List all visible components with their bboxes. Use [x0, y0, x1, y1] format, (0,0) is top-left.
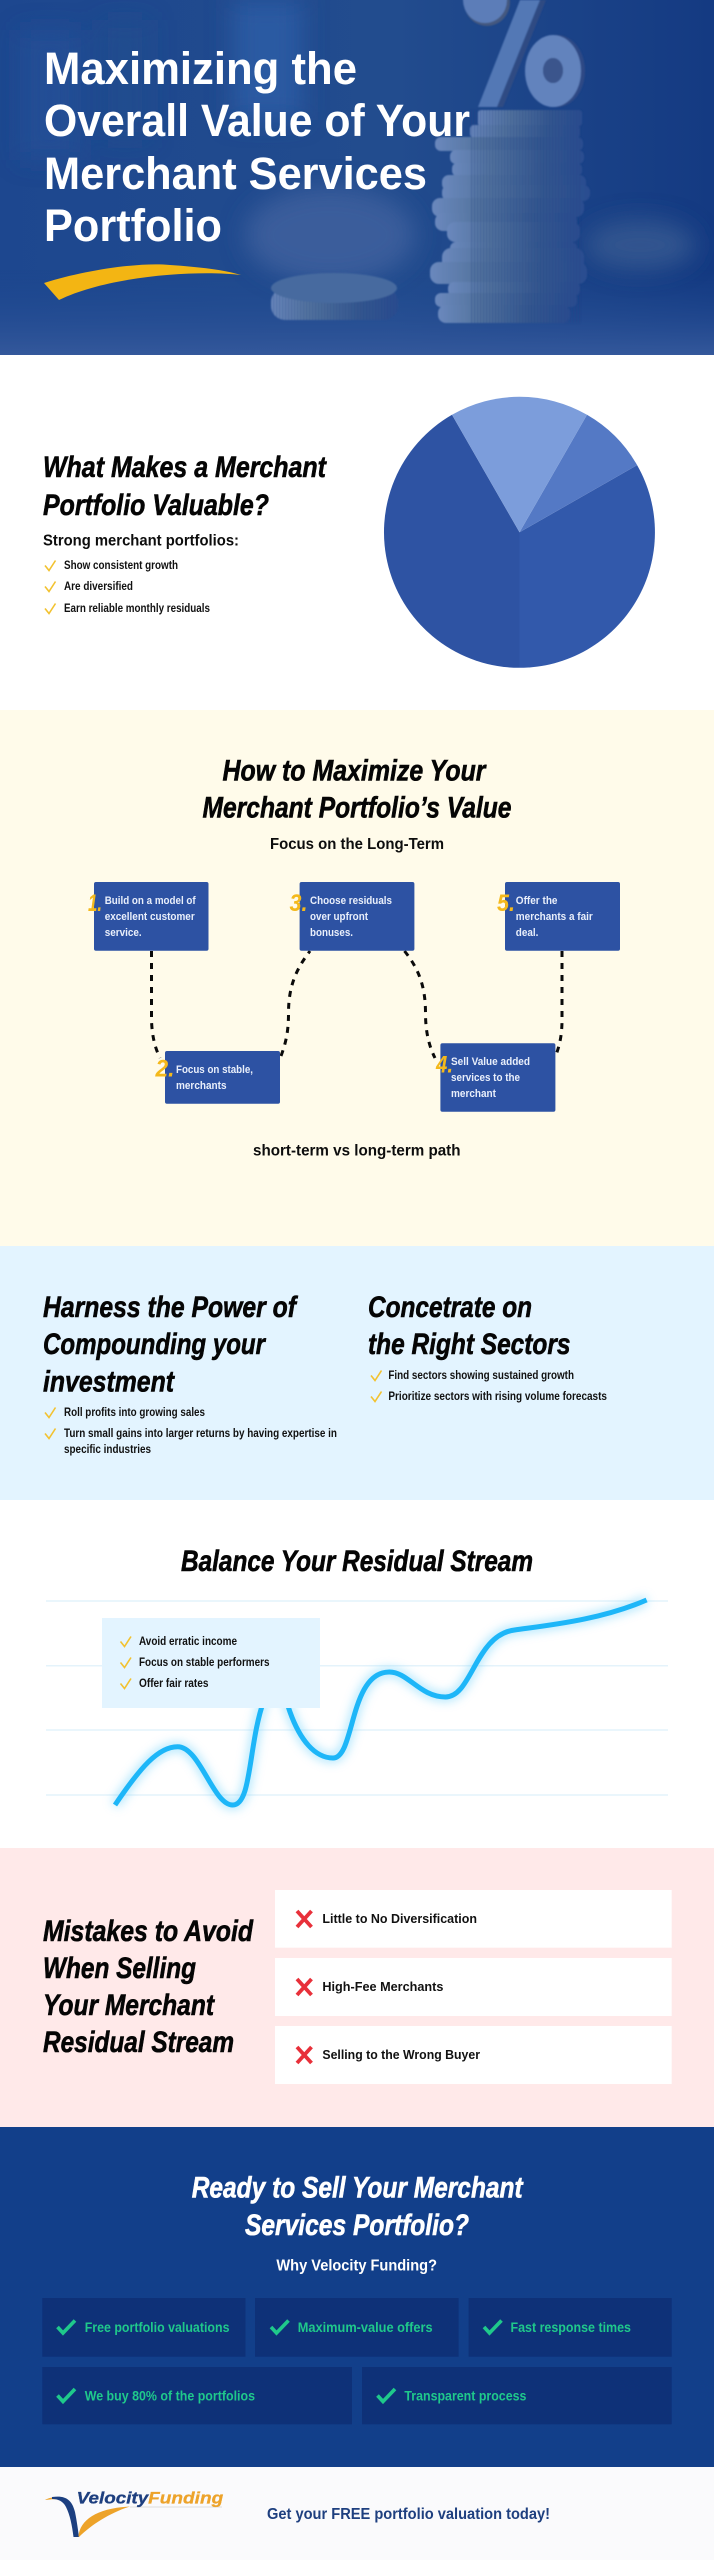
mistake card 2: High-Fee Merchants	[322, 1979, 443, 1994]
callout: Focus on stable performers	[139, 1657, 270, 1669]
heading: sectors: Concetrate on	[368, 1291, 532, 1324]
callout: Offer fair rates	[139, 1678, 208, 1690]
panel: what makes a portfolio valuable	[0, 355, 714, 710]
hero background photo: blurred shapes	[20, 0, 695, 283]
title	[44, 43, 470, 251]
line chart	[46, 1600, 668, 1805]
heading: When Selling	[43, 1952, 196, 1985]
heading: What Makes a Merchant	[43, 451, 328, 484]
benefit: free valuations	[42, 2298, 245, 2357]
heading: compounding: Compounding your	[43, 1328, 267, 1361]
benefit: we buy 80%	[42, 2367, 352, 2424]
illustration: small coin stack	[271, 273, 398, 320]
callout: Avoid erratic income	[139, 1636, 237, 1648]
heading: Merchant Portfolio’s Value	[202, 792, 512, 824]
checklist: compounding: specific industries	[64, 1444, 151, 1456]
subheading: Strong merchant portfolios:	[43, 532, 239, 550]
mistake card 3	[275, 2026, 672, 2084]
heading: How to Maximize Your	[222, 754, 487, 788]
panel: how to maximize	[0, 710, 714, 1246]
mistake card 1	[275, 1890, 672, 1948]
checklist: sectors	[371, 1370, 607, 1403]
benefit: fast response	[469, 2298, 672, 2357]
step 3: over upfront	[310, 911, 368, 923]
heading: Your Merchant	[43, 1989, 216, 2022]
subheading: Focus on the Long-Term	[270, 836, 444, 853]
callout	[102, 1618, 320, 1708]
step 1: Build on a model of	[105, 895, 196, 907]
step 5: Offer the	[516, 895, 558, 907]
mistake card 3: Selling to the Wrong Buyer	[322, 2047, 480, 2062]
step 5: 5.	[497, 890, 515, 917]
caption: short-term vs long-term path	[253, 1142, 460, 1160]
heading: Mistakes to Avoid	[43, 1915, 254, 1948]
panel: footer	[0, 2467, 714, 2560]
step 2: merchants	[176, 1080, 226, 1092]
step 4: 4.	[435, 1052, 453, 1078]
hero ground	[0, 270, 714, 355]
benefit: transparent process	[362, 2367, 672, 2424]
step 2: 2.	[155, 1056, 174, 1082]
step 2	[155, 1051, 280, 1104]
benefit: maximum value: Maximum-value offers	[298, 2320, 433, 2335]
step 3: 3.	[290, 890, 308, 917]
illustration: tall coin stack	[430, 110, 590, 323]
heading: compounding	[43, 1291, 298, 1398]
logo: Funding	[148, 2488, 224, 2507]
heading: Balance Your Residual Stream	[181, 1545, 533, 1578]
title: Maximizing the	[44, 43, 357, 94]
step 1: service.	[105, 927, 142, 939]
benefit: fast response: Fast response times	[510, 2320, 631, 2335]
subheading: Why Velocity Funding?	[276, 2258, 437, 2274]
panel: mistakes to avoid	[0, 1848, 714, 2127]
heading	[192, 2172, 524, 2242]
step 4: merchant	[451, 1088, 496, 1100]
checklist: compounding	[45, 1407, 337, 1456]
checklist	[45, 560, 210, 615]
heading: sectors	[368, 1291, 570, 1361]
icon: yellow swoosh	[44, 264, 241, 300]
logo	[45, 2488, 224, 2537]
panel: balance your residual stream	[0, 1500, 714, 1848]
checklist: compounding: Turn small gains into larger returns by having expertise in	[64, 1428, 337, 1440]
checklist: sectors: Prioritize sectors with rising volume forecasts	[388, 1391, 607, 1403]
benefit: free valuations: Free portfolio valuations	[85, 2320, 230, 2335]
step 4: services to the	[451, 1072, 520, 1084]
dashed connectors	[152, 951, 562, 1058]
heading: sectors: the Right Sectors	[368, 1328, 570, 1361]
heading	[43, 1915, 254, 2059]
panel: hero	[0, 0, 714, 355]
icon: percent sign	[463, 0, 585, 107]
benefit: we buy 80%: We buy 80% of the portfolios	[85, 2389, 255, 2404]
checklist: Are diversified	[64, 581, 133, 593]
step 3: Choose residuals	[310, 895, 392, 907]
step 5	[497, 882, 620, 951]
logo: Velocity	[77, 2488, 150, 2507]
step 5: deal.	[516, 927, 538, 939]
step 3: bonuses.	[310, 927, 353, 939]
title: Merchant Services	[44, 148, 427, 199]
step 2: Focus on stable,	[176, 1064, 253, 1076]
checklist: Show consistent growth	[64, 560, 178, 572]
heading: compounding: investment	[43, 1366, 176, 1398]
panel: ready to sell	[0, 2127, 714, 2467]
heading: Residual Stream	[43, 2026, 234, 2059]
panel: compounding and sectors	[0, 1246, 714, 1500]
mistake card 1: Little to No Diversification	[322, 1911, 477, 1926]
mistake card 2	[275, 1958, 672, 2016]
title: Overall Value of Your	[44, 95, 470, 146]
title: Portfolio	[44, 200, 222, 251]
step 3	[290, 882, 414, 951]
heading	[43, 451, 328, 522]
call to action: Get your FREE portfolio valuation today!	[267, 2506, 550, 2523]
step 1	[88, 882, 208, 951]
step 5: merchants a fair	[516, 911, 593, 923]
heading	[202, 754, 512, 824]
benefit: transparent process: Transparent process	[404, 2389, 526, 2404]
pie chart	[384, 397, 655, 668]
step 1: 1.	[88, 890, 102, 917]
step 4	[435, 1043, 555, 1112]
heading: Portfolio Valuable?	[43, 489, 269, 522]
heading: Services Portfolio?	[245, 2209, 469, 2242]
heading: compounding: Harness the Power of	[43, 1291, 298, 1324]
step 1: excellent customer	[105, 911, 195, 923]
checklist: sectors: Find sectors showing sustained growth	[388, 1370, 574, 1382]
heading: Ready to Sell Your Merchant	[192, 2172, 524, 2204]
step 4: Sell Value added	[451, 1056, 530, 1068]
checklist: Earn reliable monthly residuals	[64, 603, 210, 615]
benefit: maximum value	[255, 2298, 459, 2357]
checklist: compounding: Roll profits into growing sales	[64, 1407, 205, 1419]
